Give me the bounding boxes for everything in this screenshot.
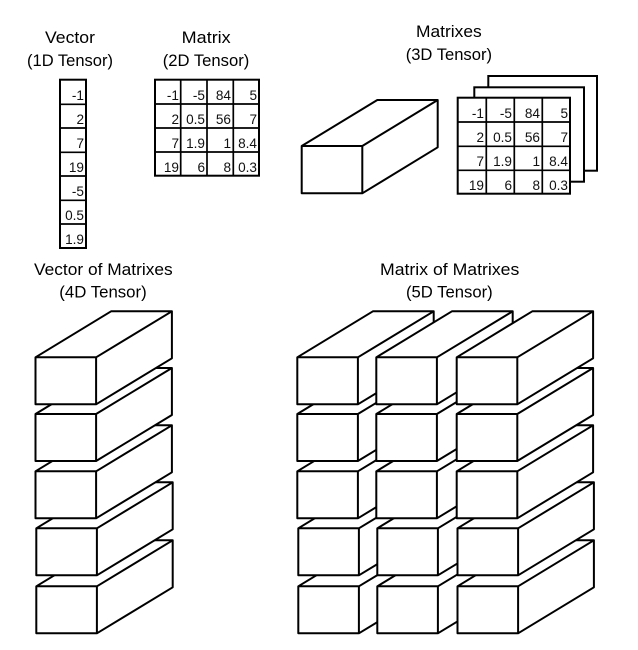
row 2 — [297, 368, 593, 461]
front matrix: 1 — [532, 154, 540, 169]
front matrix: 0.5 — [493, 130, 512, 145]
front matrix: 6 — [504, 178, 512, 193]
middle sheet — [474, 87, 584, 182]
4D tensor: stack of cuboids — [36, 311, 173, 633]
heading: vector — [27, 28, 113, 70]
front matrix: 56 — [525, 130, 540, 145]
vector table: 2 — [76, 112, 84, 127]
vector table: 19 — [69, 160, 84, 175]
heading: vector: Vector — [45, 28, 95, 47]
cuboid row 3 — [36, 425, 172, 518]
front matrix: 2 — [476, 130, 484, 145]
row 3 — [297, 425, 593, 518]
matrix table: 5 — [249, 88, 257, 103]
front matrix: -1 — [472, 106, 484, 121]
matrix table: 8 — [223, 160, 231, 175]
heading: vector of matrixes: (4D Tensor) — [59, 282, 147, 302]
heading: matrix — [163, 28, 249, 70]
row 1 — [297, 311, 593, 404]
front matrix — [458, 98, 570, 194]
matrix table: 84 — [216, 88, 231, 103]
matrix table: 1 — [223, 136, 231, 151]
matrix table: 7 — [171, 136, 179, 151]
front matrix: 8.4 — [549, 154, 568, 169]
front matrix: 19 — [469, 178, 484, 193]
heading: matrix of matrixes: Matrix of Matrixes — [380, 260, 519, 279]
heading: matrixes: Matrixes — [416, 22, 482, 41]
matrix table: -5 — [193, 88, 205, 103]
cuboid row 4 — [36, 482, 173, 575]
heading: matrix: (2D Tensor) — [163, 51, 249, 70]
heading: vector of matrixes — [34, 260, 173, 302]
stacked matrices: 3D tensor — [458, 76, 597, 194]
vector table: -5 — [72, 184, 84, 199]
vector table: 0.5 — [65, 208, 84, 223]
matrix table: 19 — [164, 160, 179, 175]
matrix table: 1.9 — [186, 136, 205, 151]
heading: matrixes: (3D Tensor) — [406, 45, 492, 64]
front matrix: -5 — [500, 106, 512, 121]
front matrix: 7 — [476, 154, 484, 169]
cuboid row 2 — [36, 368, 172, 461]
front matrix: 8 — [532, 178, 540, 193]
cuboid row 1 — [36, 311, 172, 404]
vector table: 1.9 — [65, 232, 84, 247]
matrix table: 2 — [171, 112, 179, 127]
matrix table: 0.5 — [186, 112, 205, 127]
heading: matrix: Matrix — [182, 28, 231, 47]
cuboid row 5 — [36, 540, 173, 633]
vector table: 7 — [76, 136, 84, 151]
front matrix: 1.9 — [493, 154, 512, 169]
matrix table: 0.3 — [238, 160, 257, 175]
vector table — [60, 80, 86, 248]
row 5 — [298, 540, 594, 633]
heading: vector: (1D Tensor) — [27, 51, 113, 70]
front matrix: 84 — [525, 106, 540, 121]
heading: matrixes — [406, 22, 492, 64]
heading: matrix of matrixes: (5D Tensor) — [406, 282, 493, 302]
matrix table — [155, 80, 259, 176]
matrix table: -1 — [167, 88, 179, 103]
heading: vector of matrixes: Vector of Matrixes — [34, 260, 173, 279]
back sheet — [488, 76, 597, 171]
heading: matrix of matrixes — [380, 260, 519, 302]
row 4 — [298, 482, 594, 575]
front matrix: 0.3 — [549, 178, 568, 193]
matrix table: 7 — [249, 112, 257, 127]
matrix table: 56 — [216, 112, 231, 127]
front matrix: 5 — [560, 106, 568, 121]
5D tensor: grid of cuboids — [297, 311, 594, 633]
matrix table: 6 — [197, 160, 205, 175]
front matrix: 7 — [560, 130, 568, 145]
cuboid: 3D tensor — [302, 100, 438, 193]
matrix table: 8.4 — [238, 136, 257, 151]
vector table: -1 — [72, 88, 84, 103]
